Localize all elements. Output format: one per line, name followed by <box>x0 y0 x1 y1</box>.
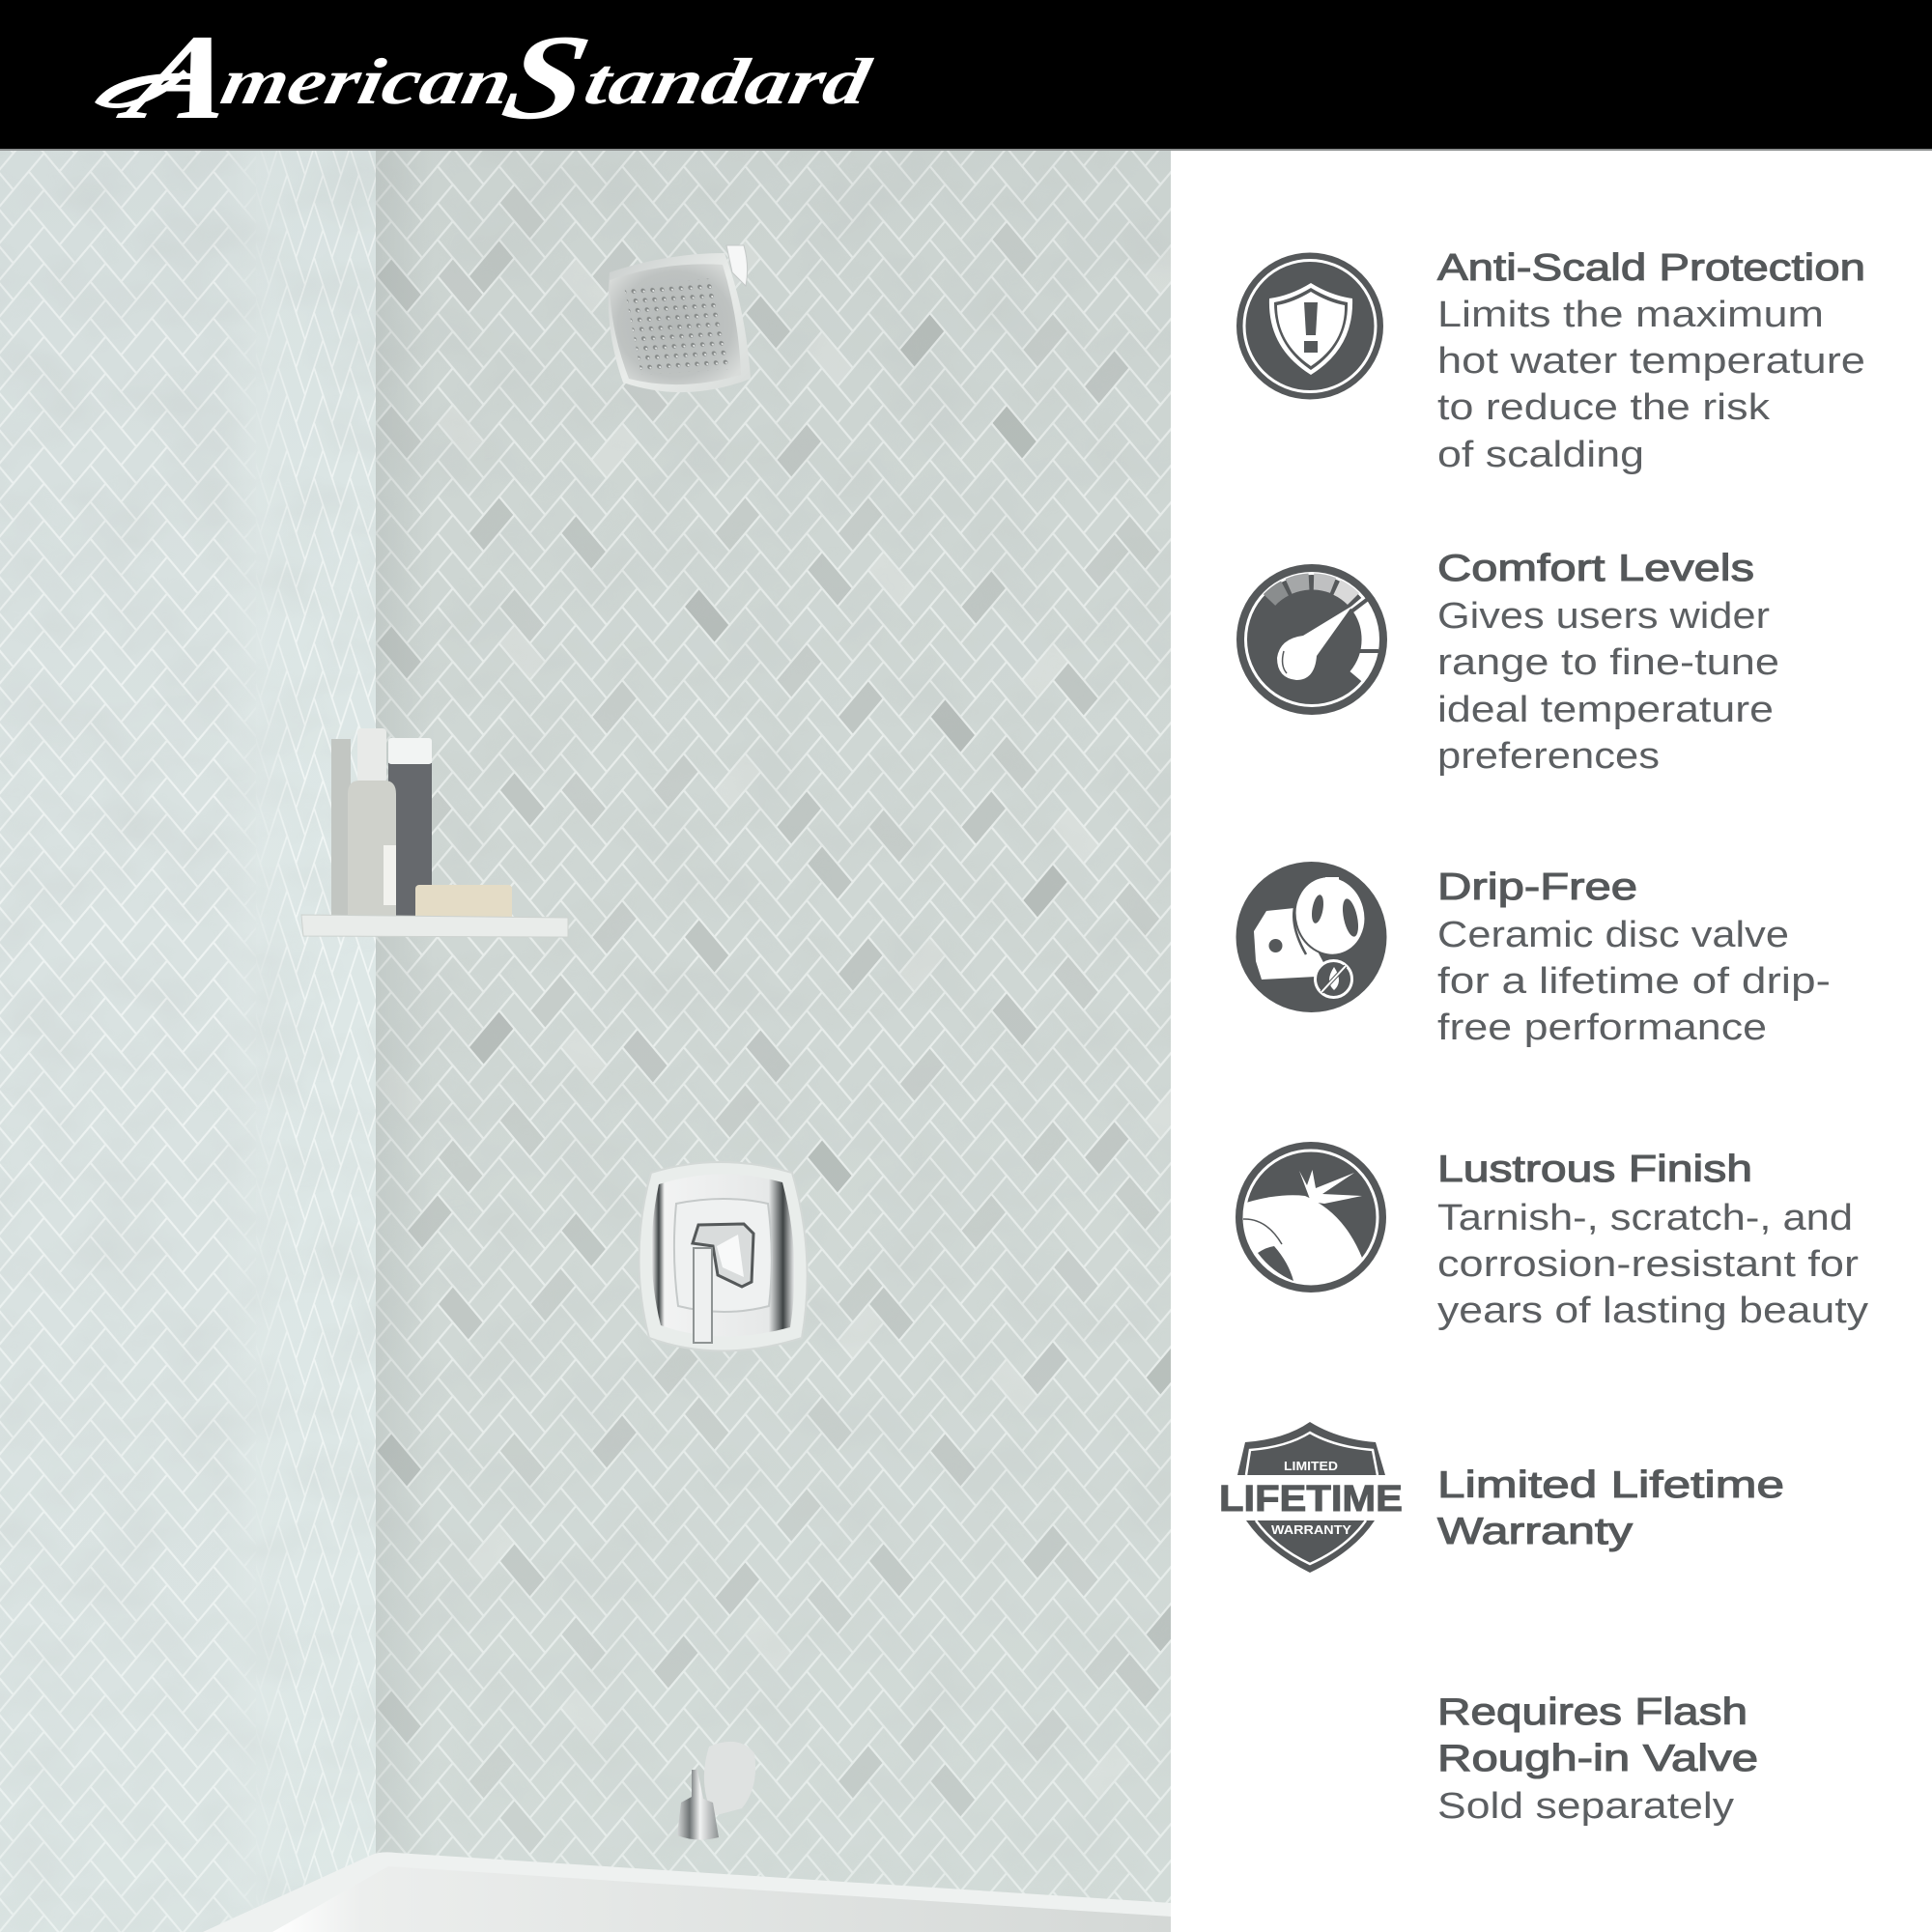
tub spout <box>677 1742 755 1840</box>
panel: features <box>1171 151 1932 1932</box>
panel: tiled shower wall photo <box>0 150 1191 1932</box>
text: Drip-Free: Drip-Free <box>1437 867 1637 908</box>
text: Requires Flash Rough-in Valve: Rough-in Valve <box>1437 1738 1758 1779</box>
text: Lustrous Finish: Lustrous Finish <box>1437 1149 1752 1190</box>
text: Comfort Levels: ideal temperature <box>1437 690 1774 730</box>
text: Lustrous Finish <box>1437 1149 1868 1331</box>
text: Drip-Free: Ceramic disc valve <box>1437 915 1789 955</box>
icon: drip-free ceramic valve <box>1236 862 1387 1012</box>
text: Drip-Free <box>1437 867 1831 1048</box>
left tiled wall <box>0 150 376 1932</box>
icon: limited lifetime warranty badge: LIFETIME <box>1219 1479 1403 1520</box>
text: Comfort Levels: range to fine-tune <box>1437 642 1779 683</box>
text: Anti-Scald Protection: Limits the maximum <box>1437 295 1824 335</box>
text: Lustrous Finish: years of lasting beauty <box>1437 1291 1868 1331</box>
logo: American Standard: S <box>493 9 601 145</box>
text: Limited Lifetime Warranty <box>1437 1464 1784 1552</box>
text: Drip-Free: free performance <box>1437 1008 1767 1048</box>
bathtub edge <box>203 1852 1172 1932</box>
text: Requires Flash Rough-in Valve: Requires Flash <box>1437 1691 1747 1733</box>
text: Limited Lifetime Warranty: Warranty <box>1437 1511 1634 1552</box>
text: Comfort Levels <box>1437 548 1779 777</box>
marble mottling and lighting overlay <box>0 150 1172 1932</box>
text: Anti-Scald Protection <box>1437 247 1865 475</box>
text: Anti-Scald Protection: hot water temperature <box>1437 341 1865 382</box>
shower head <box>609 245 751 392</box>
text: Comfort Levels: Gives users wider <box>1437 596 1770 637</box>
right tiled wall <box>376 150 1191 1932</box>
icon: anti-scald shield <box>1236 253 1383 400</box>
text: Lustrous Finish: Tarnish-, scratch-, and <box>1437 1198 1853 1238</box>
text: Lustrous Finish: corrosion-resistant for <box>1437 1244 1859 1285</box>
icon: limited lifetime warranty badge: LIMITED <box>1284 1459 1338 1473</box>
text: Anti-Scald Protection: of scalding <box>1437 435 1644 475</box>
shelf with bottles and soap <box>301 728 568 937</box>
text: Anti-Scald Protection: Anti-Scald Protection <box>1437 247 1865 289</box>
header bar <box>0 0 1932 151</box>
icon: comfort gauge <box>1236 564 1387 715</box>
logo: American Standard: tandard <box>579 45 878 118</box>
text: Comfort Levels: preferences <box>1437 736 1660 777</box>
logo: American Standard: A <box>109 10 251 145</box>
text: Limited Lifetime Warranty: Limited Lifetime <box>1437 1464 1784 1506</box>
text: Anti-Scald Protection: to reduce the risk <box>1437 387 1771 428</box>
text: Comfort Levels: Comfort Levels <box>1437 548 1754 589</box>
icon: limited lifetime warranty badge: WARRANTY <box>1271 1522 1351 1537</box>
icon: lustrous finish <box>1236 1142 1386 1293</box>
icon: limited lifetime warranty badge <box>1219 1422 1403 1573</box>
logo: American Standard <box>95 9 878 145</box>
text: Requires Flash Rough-in Valve <box>1437 1691 1758 1827</box>
shower valve trim with lever handle <box>639 1162 808 1350</box>
text: Requires Flash Rough-in Valve: Sold separately <box>1437 1786 1734 1827</box>
text: Drip-Free: for a lifetime of drip- <box>1437 961 1831 1002</box>
logo: American Standard: merican <box>215 45 519 118</box>
